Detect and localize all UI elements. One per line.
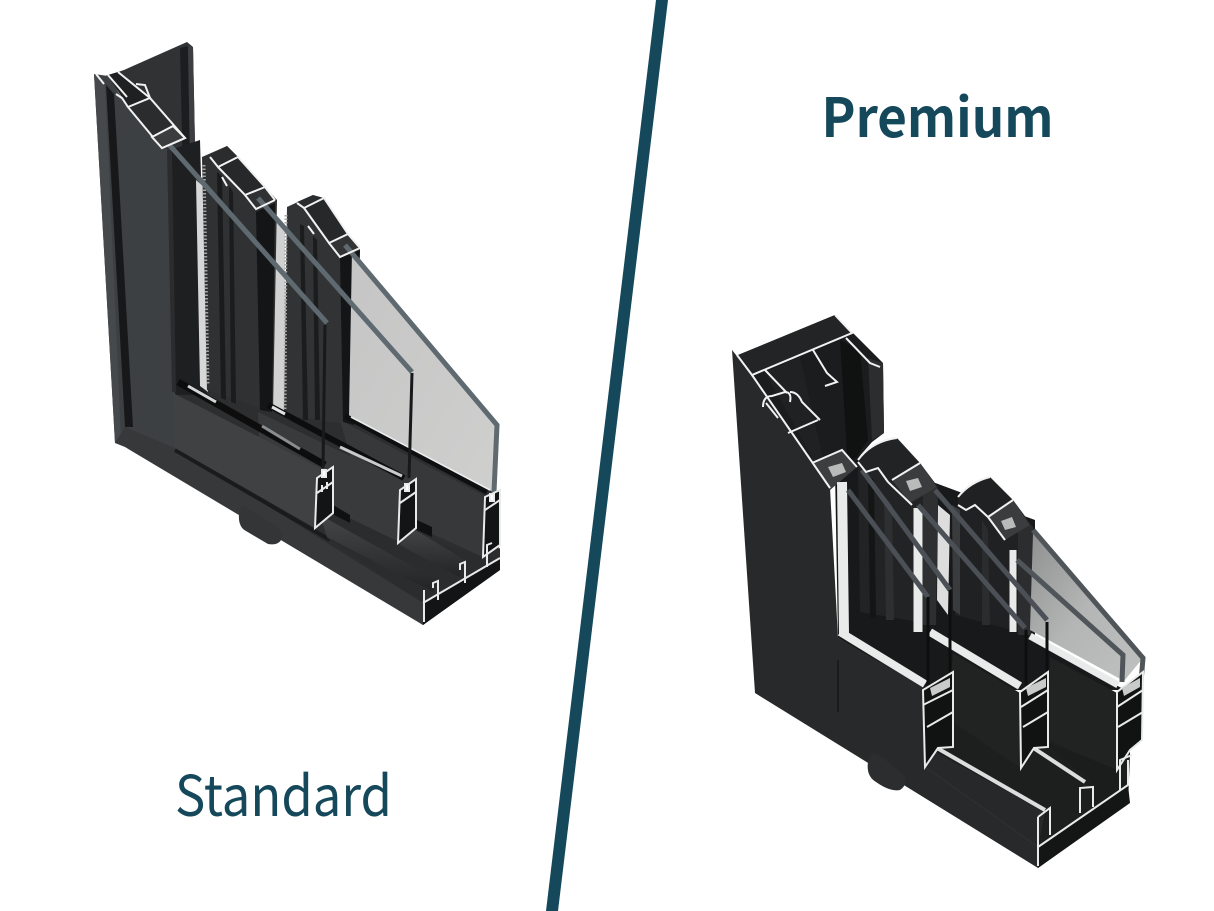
sash 2 (premium) [955,477,1033,635]
back frame [738,315,884,490]
bead and spacer block 3 [988,500,1030,540]
head section: sash 2 [297,195,360,257]
divider line [546,0,668,911]
rail recess dark areas [950,720,1087,812]
glass edges set 2 [918,490,1047,685]
window interior base [170,380,500,625]
sill 2 highlights [268,405,404,478]
panel 2 [258,412,400,541]
shadows below panels [333,505,350,523]
window profile: Premium [732,315,1143,868]
head section: sash 1 [210,146,275,209]
head section frame [737,315,880,488]
head channel cavity [108,72,150,107]
heading: Standard: Standard [175,752,392,833]
adjuster pad [239,506,282,544]
glazing blocks at sills [930,678,1140,696]
left frame face [94,74,175,450]
glazing panel [1030,533,1143,681]
bead and spacer block 2 [892,463,937,503]
bottom track [115,427,500,625]
left frame face [732,350,1038,868]
rail 1 [320,515,437,592]
glass edges set 1 [848,470,950,685]
sill 3 highlights [345,416,487,492]
bead and spacer block 1 [812,450,857,490]
back frame fin [105,42,200,400]
panel 3 [340,420,483,557]
white spacer strips [840,482,1118,686]
panel 2 [947,653,1020,768]
sill 1 highlights [178,382,325,465]
sash 2 (middle) [284,195,360,425]
sash 1 (middle) [202,146,277,412]
rail highlights [937,748,1045,810]
front track face [927,750,1045,847]
panel 3 [1047,657,1117,770]
sill sections [315,467,500,622]
track recess [327,510,500,603]
panel 1 [173,393,320,528]
heading: Premium: Premium [822,74,1054,153]
glass edge pane 2 [258,198,412,372]
sill sections [923,672,1143,866]
lower base fill [925,700,1130,868]
glass gaps behind the sashes [196,180,208,392]
sash 1 (premium) [858,438,938,625]
glass edge pane 1 [165,140,327,323]
glass gap [937,505,950,615]
glass pane [349,250,497,492]
head section: frame [96,72,185,148]
window interior base [835,455,1125,690]
window profile: Standard [94,42,500,625]
glass edge pane 3 [345,245,497,492]
glass edges set 3 [1017,530,1143,682]
rail 2 [400,527,465,577]
adjuster pad [868,753,905,790]
track underside [1038,785,1130,868]
head section sashes [858,438,1013,540]
